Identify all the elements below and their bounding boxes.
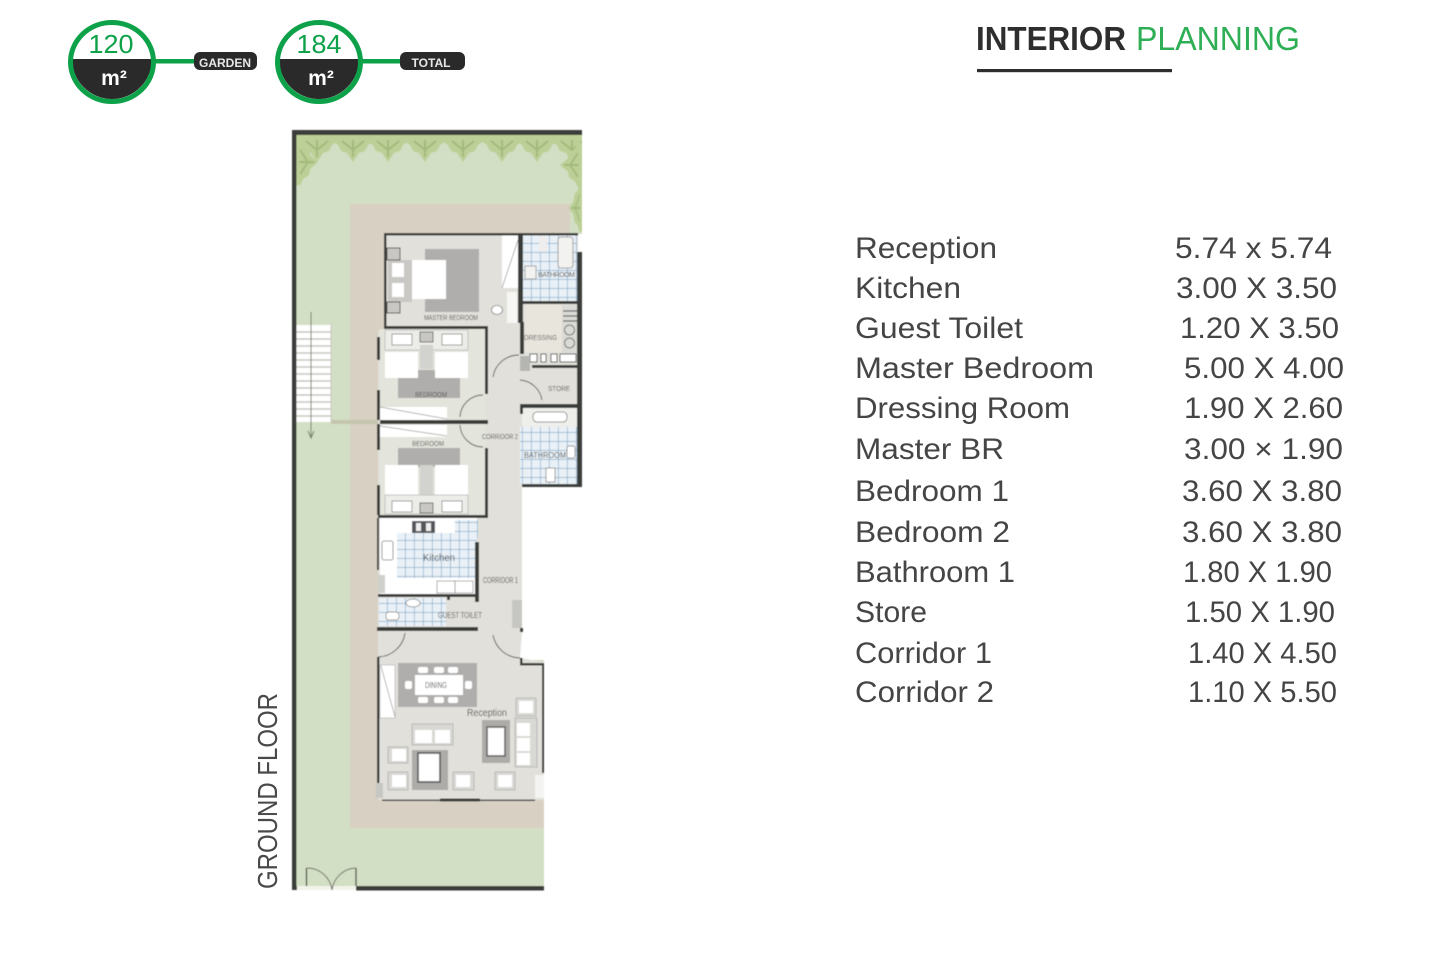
row: dressing room: Dressing Room (855, 392, 1070, 425)
bathroom one (520, 408, 577, 484)
badge: total area: TOTAL (412, 56, 450, 70)
garden gate (297, 868, 356, 890)
row: reception (855, 232, 1332, 265)
row: master bathroom: Master BR (855, 433, 1004, 466)
title: interior planning (976, 20, 1300, 72)
terrace band (350, 204, 570, 828)
row: store (855, 596, 1335, 629)
dining table (398, 663, 477, 707)
row: corridor 2 (855, 676, 1337, 709)
row: corridor 1 (855, 637, 1337, 670)
row: master bedroom: Master Bedroom (855, 352, 1094, 385)
store: STORE (548, 386, 570, 393)
garden lawn (296, 134, 582, 886)
bedroom one: BEDROOM (415, 392, 447, 399)
row: guest toilet: Guest Toilet (855, 312, 1024, 345)
row: reception: 5.74 x 5.74 (1175, 232, 1332, 265)
row: bathroom 1 (855, 556, 1332, 589)
house floor (378, 234, 578, 800)
bedroom two: BEDROOM (412, 441, 444, 448)
corridor labels (482, 434, 522, 628)
bathroom one: BATHROOM (524, 450, 566, 460)
row: corridor 1: 1.40 X 4.50 (1188, 637, 1337, 670)
row: dressing room: 1.90 X 2.60 (1184, 392, 1343, 425)
row: bedroom 1: 3.60 X 3.80 (1182, 475, 1342, 508)
row: reception: Reception (855, 232, 997, 265)
title: interior planning: PLANNING (1136, 20, 1300, 57)
row: bedroom 2 (855, 516, 1342, 549)
ground floor label: GROUND FLOOR (252, 693, 283, 889)
row: corridor 2: 1.10 X 5.50 (1188, 676, 1337, 709)
row: store: Store (855, 596, 927, 629)
walls (292, 130, 582, 890)
bedroom two (380, 424, 485, 515)
row: store: 1.50 X 1.90 (1185, 596, 1335, 629)
corridor labels: CORRIDOR 1 (483, 576, 518, 585)
dining table: DINING (425, 681, 447, 690)
row: kitchen: 3.00 X 3.50 (1176, 272, 1337, 305)
row: guest toilet: 1.20 X 3.50 (1180, 312, 1339, 345)
row: guest toilet (855, 312, 1339, 345)
master bathroom: BATHROOM (538, 272, 575, 279)
row: master bedroom: 5.00 X 4.00 (1184, 352, 1344, 385)
row: corridor 2: Corridor 2 (855, 676, 994, 709)
row: kitchen (855, 272, 1337, 305)
title: interior planning: INTERIOR (976, 20, 1126, 57)
badge: total area: 184 (296, 29, 342, 59)
dressing room (520, 305, 577, 371)
room dimensions table (855, 232, 1344, 709)
bedroom one (380, 329, 485, 420)
row: master bathroom: 3.00 × 1.90 (1184, 433, 1343, 466)
door swings (378, 355, 542, 658)
guest toilet (379, 598, 482, 626)
foliage (294, 134, 593, 232)
badge: total area (278, 22, 465, 102)
kitchen: Kitchen (423, 553, 455, 564)
floor plan (292, 130, 593, 890)
dressing room: DRESSING (524, 335, 557, 342)
master bathroom (523, 235, 577, 302)
row: kitchen: Kitchen (855, 272, 961, 305)
guest toilet: GUEST TOILET (438, 611, 482, 620)
stairs and path (296, 312, 379, 438)
row: bedroom 1: Bedroom 1 (855, 475, 1009, 508)
reception and dining: Reception (467, 708, 507, 719)
row: bedroom 2: Bedroom 2 (855, 516, 1010, 549)
sofa set (388, 698, 537, 790)
row: bathroom 1: 1.80 X 1.90 (1183, 556, 1332, 589)
badge: garden area: 120 (88, 29, 134, 59)
kitchen (378, 518, 478, 594)
row: dressing room (855, 392, 1343, 425)
badge: garden area (70, 22, 257, 102)
row: master bathroom (855, 433, 1343, 466)
badge: garden area: m² (101, 67, 127, 90)
row: master bedroom (855, 352, 1344, 385)
row: bedroom 2: 3.60 X 3.80 (1182, 516, 1342, 549)
master bedroom: MASTER BEDROOM (424, 315, 478, 322)
badge: total area: m² (308, 67, 334, 90)
badge: garden area: GARDEN (199, 56, 251, 70)
row: bedroom 1 (855, 475, 1342, 508)
row: bathroom 1: Bathroom 1 (855, 556, 1015, 589)
row: corridor 1: Corridor 1 (855, 637, 992, 670)
master bedroom (387, 235, 518, 323)
reception and dining (376, 663, 544, 798)
corridor labels: CORRIDOR 2 (482, 434, 518, 441)
